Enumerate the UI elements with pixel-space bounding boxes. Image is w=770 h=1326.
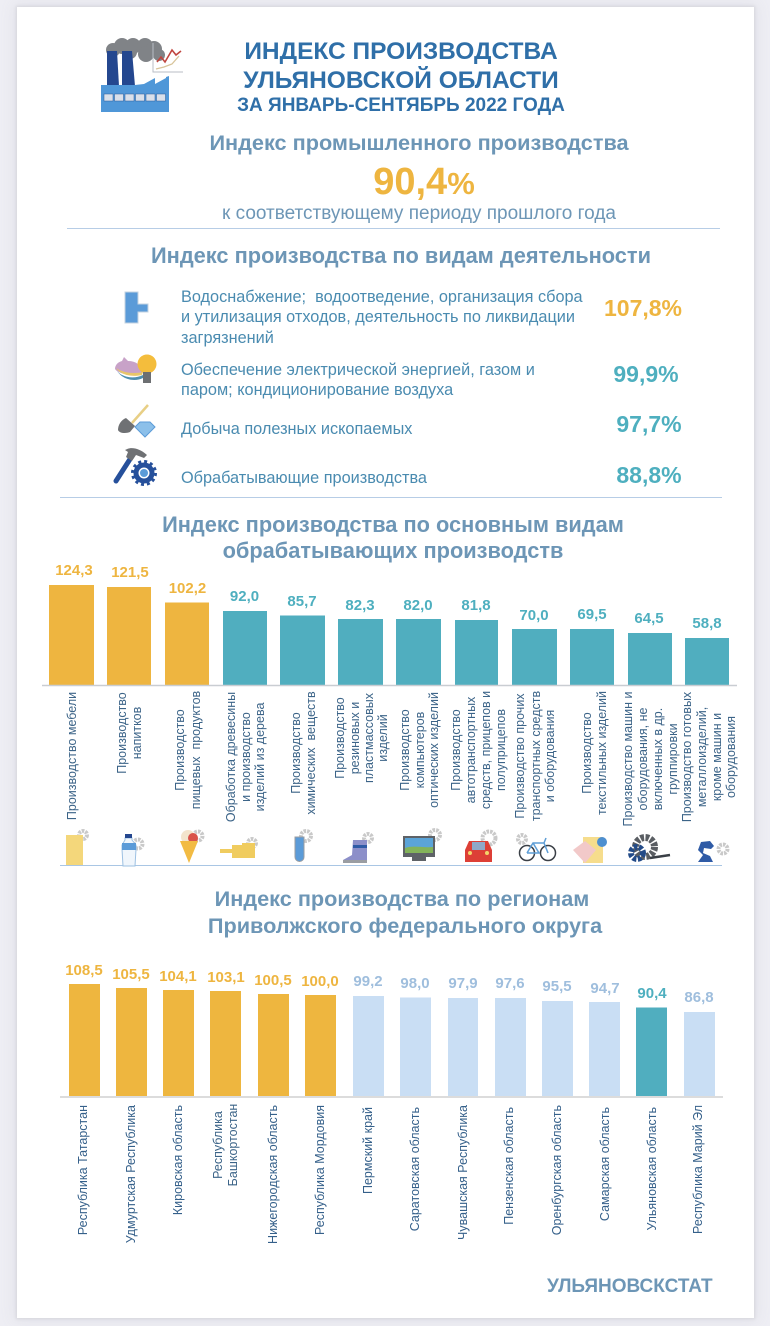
category labels: manufacturing types: Производство машин и	[621, 692, 635, 826]
bar chart: regions: 95,5	[542, 978, 572, 995]
bar chart: regions: 98,0	[400, 975, 430, 992]
bar chart: manufacturing types: 82,0	[403, 597, 433, 614]
bar chart: regions: 104,1	[159, 968, 197, 985]
value: electricity: 99,9%	[613, 361, 679, 387]
bar chart: manufacturing types: 102,2	[169, 580, 206, 597]
heading: activity: Индекс производства по видам деятельности	[151, 243, 651, 268]
text: water supply: загрязнений	[181, 329, 274, 347]
category labels: regions: Удмуртская Республика	[124, 1105, 138, 1243]
category labels: manufacturing types: Производство	[398, 709, 412, 791]
value: water supply: 107,8%	[604, 295, 682, 321]
bar chart: regions: 90,4	[637, 985, 667, 1002]
value: mining: 97,7%	[616, 411, 682, 437]
icon: wood blocks	[220, 843, 255, 858]
bar chart: manufacturing types: 58,8	[692, 615, 722, 632]
category labels: manufacturing types: Производство	[580, 712, 594, 794]
bar chart: manufacturing types: 92,0	[230, 588, 259, 605]
icon: hammer and gear	[116, 448, 156, 484]
category labels: regions: Башкортостан	[226, 1104, 240, 1186]
icon row: manufacturing types	[60, 830, 728, 866]
bar chart: manufacturing types: 85,7	[287, 593, 317, 610]
icon: bicycle	[520, 838, 556, 860]
category labels: regions: Пермский край	[361, 1107, 375, 1194]
title: ЗА ЯНВАРЬ-СЕНТЯБРЬ 2022 ГОДА	[237, 95, 565, 116]
category labels: manufacturing types: Производство	[449, 709, 463, 791]
category labels: regions: Пензенская область	[502, 1107, 516, 1225]
category labels: manufacturing types: Производство прочих	[513, 693, 527, 819]
category labels: regions: Республика	[211, 1111, 225, 1179]
icon: robot arm	[698, 841, 714, 862]
text: electricity: паром; кондиционирование воздуха	[181, 381, 454, 399]
bar chart: manufacturing types: 70,0	[519, 607, 549, 624]
category labels: regions: Самарская область	[598, 1107, 612, 1221]
category labels: regions: Ульяновская область	[645, 1107, 659, 1231]
icon: wardrobe	[66, 835, 83, 865]
bar chart: regions: 105,5	[112, 966, 150, 983]
icon: shovel and diamond	[118, 405, 155, 437]
category labels: manufacturing types: Производство	[333, 697, 347, 779]
category labels: manufacturing types: Обработка древесины	[224, 692, 238, 822]
bar chart: regions: 103,1	[207, 969, 245, 986]
category labels: manufacturing types: Производство мебели	[65, 692, 79, 820]
category labels: manufacturing types: оптических изделий	[427, 692, 441, 808]
category labels: manufacturing types: оборудования, не	[636, 708, 650, 810]
headline industrial production index	[209, 130, 630, 224]
heading: manufacturing types	[162, 512, 624, 563]
category labels: manufacturing types: пластмассовых	[362, 692, 376, 783]
bar chart: manufacturing types: 64,5	[634, 610, 664, 627]
text: manufacturing: Обрабатывающие производства	[181, 469, 428, 487]
icon: monitor	[403, 836, 435, 861]
category labels: regions: Республика Мордовия	[313, 1105, 327, 1235]
footer: source: УЛЬЯНОВСКСТАТ	[547, 1276, 713, 1297]
category labels: manufacturing types: транспортных средств	[529, 690, 543, 821]
icon: bottle	[122, 834, 136, 866]
bar chart: regions: 100,0	[301, 973, 339, 990]
category labels: regions	[76, 1104, 705, 1244]
title: ИНДЕКС ПРОИЗВОДСТВА	[244, 38, 558, 65]
category labels: manufacturing types: напитков	[130, 706, 144, 759]
headline industrial production index: Индекс промышленного производства	[209, 130, 630, 155]
category labels: manufacturing types: оборудования	[724, 716, 738, 798]
bar chart: regions: 97,6	[495, 975, 525, 992]
headline industrial production index: 90,4%	[373, 161, 475, 203]
title	[237, 38, 565, 116]
category labels: regions: Оренбургская область	[550, 1105, 564, 1235]
icon: factory with smoke and chart	[101, 38, 183, 112]
bar chart: manufacturing types: 121,5	[111, 564, 149, 581]
category labels: manufacturing types: металлоизделий,	[695, 707, 709, 807]
category labels: manufacturing types: Производство	[173, 709, 187, 791]
category labels: regions: Кировская область	[171, 1105, 185, 1215]
category labels: manufacturing types: химических веществ	[304, 691, 318, 815]
icon: test tube	[295, 837, 304, 862]
category labels: manufacturing types: полуприцепов	[494, 709, 508, 791]
heading: manufacturing types: Индекс производства по основным видам	[162, 512, 624, 537]
category labels: manufacturing types: Производство готовых	[680, 691, 694, 822]
icon: textile	[573, 837, 607, 863]
icon: water pipe	[125, 292, 148, 323]
category labels: manufacturing types: пищевых продуктов	[189, 690, 203, 809]
category labels: manufacturing types: и производство	[239, 712, 253, 802]
icon: energy bulb	[115, 354, 156, 383]
bar chart: regions	[60, 962, 723, 1097]
text: mining: Добыча полезных ископаемых	[181, 420, 412, 438]
icon: car	[465, 841, 492, 862]
text: water supply: Водоснабжение; водоотведение, организация сбора	[181, 288, 584, 306]
icon: rubber boot	[343, 840, 367, 863]
icon: ice cream	[180, 830, 198, 863]
heading: regions	[208, 886, 603, 938]
category labels: manufacturing types: изделий	[376, 714, 390, 762]
category labels: manufacturing types: средств, прицепов и	[479, 691, 493, 809]
category labels: manufacturing types: автотранспортных	[464, 696, 478, 803]
bar chart: manufacturing types: 81,8	[461, 597, 491, 614]
bar chart: regions: 94,7	[590, 980, 620, 997]
bar chart: manufacturing types: 69,5	[577, 606, 607, 623]
category labels: manufacturing types: группировки	[666, 723, 680, 795]
bar chart: manufacturing types: 124,3	[55, 562, 93, 579]
text: water supply: и утилизация отходов, деятельность по ликвидации	[181, 308, 575, 326]
category labels: regions: Республика Марий Эл	[691, 1105, 705, 1234]
value: manufacturing: 88,8%	[616, 462, 682, 488]
category labels: manufacturing types: Производство	[115, 692, 129, 774]
category labels: manufacturing types: компьютеров	[413, 711, 427, 788]
category labels: regions: Чувашская Республика	[456, 1105, 470, 1240]
category labels: regions: Республика Татарстан	[76, 1105, 90, 1235]
bar chart: regions: 86,8	[684, 989, 714, 1006]
category labels: manufacturing types: и оборудования	[543, 710, 557, 802]
category labels: regions: Нижегородская область	[266, 1105, 280, 1244]
bar chart: regions: 97,9	[448, 975, 478, 992]
panel: index by activity	[115, 243, 682, 488]
heading: regions: Индекс производства по регионам	[215, 886, 589, 911]
category labels: manufacturing types: изделий из дерева	[253, 703, 267, 811]
bar chart: regions: 100,5	[254, 972, 292, 989]
heading: regions: Приволжского федерального округа	[208, 913, 603, 938]
category labels: manufacturing types: Производство	[289, 712, 303, 794]
bar chart: manufacturing types: 82,3	[345, 597, 375, 614]
category labels: manufacturing types: текстильных изделий	[595, 691, 609, 815]
title: УЛЬЯНОВСКОЙ ОБЛАСТИ	[243, 66, 559, 94]
icon: gears	[631, 838, 670, 859]
category labels: regions: Саратовская область	[408, 1107, 422, 1231]
bar chart: manufacturing types	[42, 562, 737, 686]
heading: manufacturing types: обрабатывающих производств	[223, 538, 563, 563]
category labels: manufacturing types	[65, 690, 738, 826]
bar chart: regions: 108,5	[65, 962, 103, 979]
headline industrial production index: к соответствующему периоду прошлого года	[222, 203, 616, 224]
category labels: manufacturing types: кроме машин и	[710, 713, 724, 801]
category labels: manufacturing types: резиновых и	[348, 702, 362, 774]
text: electricity: Обеспечение электрической энергией, газом и	[181, 361, 535, 379]
bar chart: regions: 99,2	[353, 973, 383, 990]
category labels: manufacturing types: включенных в др.	[651, 708, 665, 810]
